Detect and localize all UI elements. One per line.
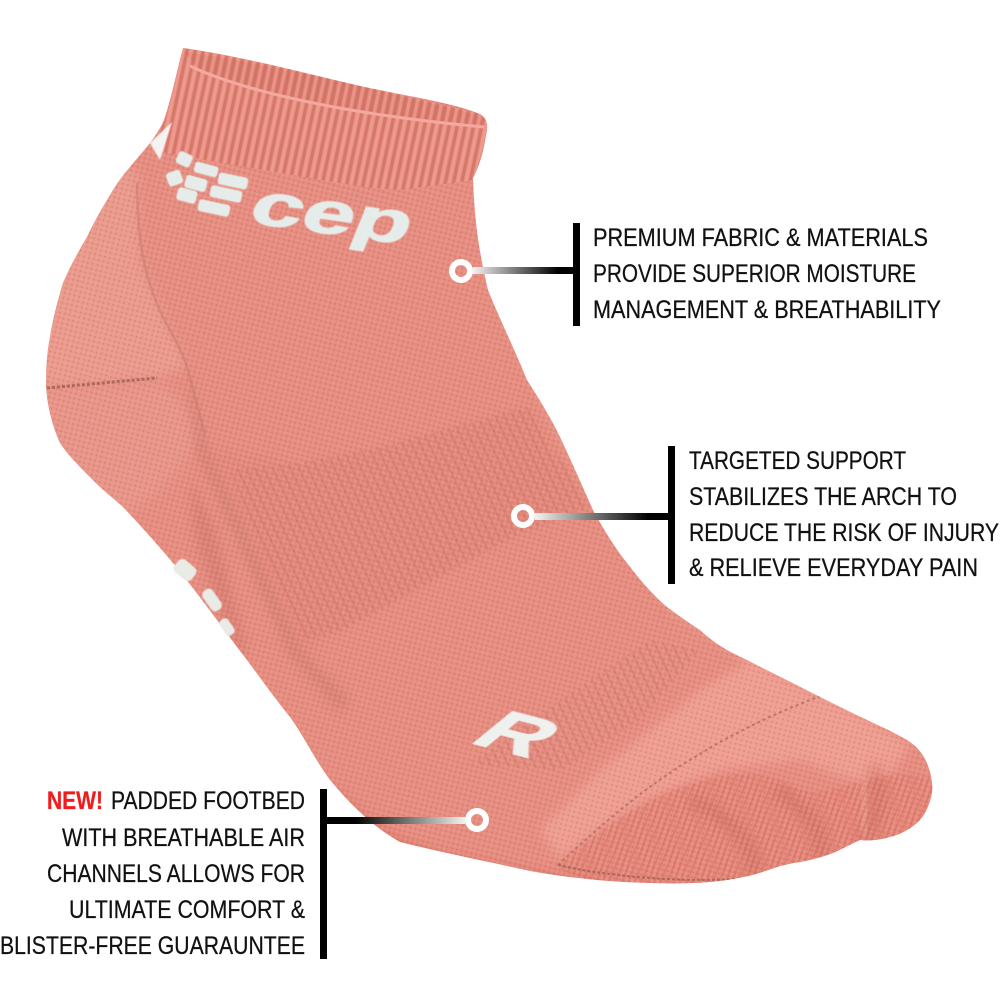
- cuff rim highlight: [190, 66, 484, 127]
- R mark: R: [455, 701, 580, 768]
- heel lower panel: [46, 388, 190, 515]
- connector bar: [573, 223, 580, 326]
- heel panel: [40, 170, 187, 388]
- callout text: STABILIZES THE ARCH TO: [689, 483, 957, 511]
- toe gap highlights: [862, 780, 866, 838]
- callout text: NEW!: [47, 787, 103, 815]
- light right edge: [546, 412, 559, 436]
- light toe band: [540, 660, 910, 860]
- seam: toe lower: [558, 865, 750, 880]
- callout text: MANAGEMENT & BREATHABILITY: [593, 296, 941, 324]
- callout text: [0, 787, 305, 960]
- callout text: PADDED FOOTBED: [111, 787, 305, 815]
- heel tab: [150, 122, 172, 160]
- texture: forefoot ribs: [470, 640, 700, 770]
- callout text: WITH BREATHABLE AIR: [62, 824, 305, 852]
- callout text: [689, 447, 999, 582]
- sole strip: [194, 501, 242, 652]
- callout text: PROVIDE SUPERIOR MOISTURE: [593, 260, 916, 288]
- side logo: [171, 557, 236, 637]
- seam: toe: [558, 695, 823, 865]
- texture: toe ribs: [558, 774, 935, 885]
- callout text: BLISTER-FREE GUARAUNTEE: [0, 932, 305, 960]
- logo dots: [165, 150, 249, 217]
- texture: knit: [46, 48, 932, 883]
- marker: [468, 811, 486, 829]
- callout: targeted support: [514, 446, 999, 584]
- callout text: ULTIMATE COMFORT &: [69, 896, 305, 924]
- sole edge shading: [339, 790, 585, 879]
- toe folds: [690, 765, 878, 876]
- toe cap: [558, 774, 935, 885]
- cuff band: [150, 48, 490, 190]
- connector line: [535, 513, 668, 520]
- connector bar: [320, 789, 327, 959]
- seam: heel panel edge: [137, 183, 205, 435]
- midfoot dark strip: [193, 418, 346, 707]
- cuff inner opening: [186, 52, 482, 127]
- cuff ribs: [150, 48, 490, 190]
- marker: [514, 507, 532, 525]
- callout text: PREMIUM FABRIC & MATERIALS: [593, 224, 928, 252]
- marker: [452, 262, 470, 280]
- texture: arch ribs: [230, 407, 590, 640]
- cep logo: [165, 150, 425, 256]
- connector line: [327, 817, 465, 824]
- seam: heel: [47, 378, 157, 388]
- logo wordmark: cep: [241, 170, 425, 256]
- callout: premium fabric: [452, 223, 941, 326]
- callout text: TARGETED SUPPORT: [689, 447, 906, 475]
- callout text: CHANNELS ALLOWS FOR: [47, 860, 305, 888]
- connector line: [473, 267, 573, 274]
- callout: padded footbed: [0, 787, 486, 960]
- connector bar: [668, 446, 675, 584]
- callout text: [593, 224, 941, 324]
- sock illustration: [40, 48, 935, 888]
- arch support panel: [586, 496, 590, 502]
